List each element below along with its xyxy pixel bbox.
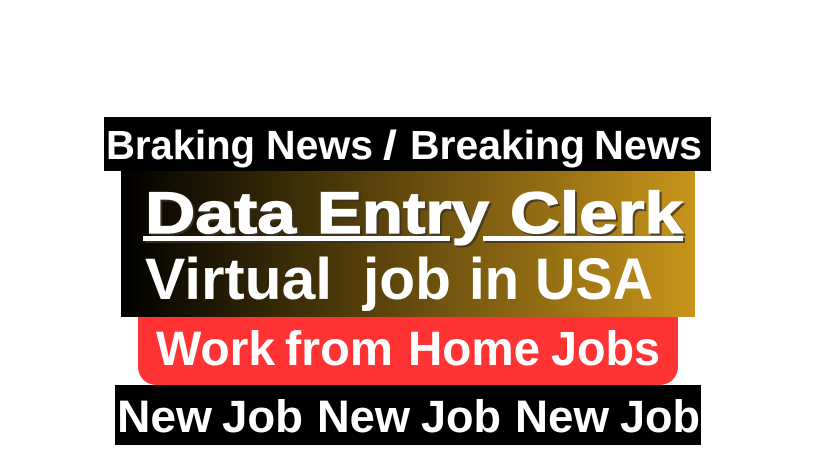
banner: work from home: Home	[408, 323, 540, 376]
banner: breaking news	[104, 117, 711, 171]
banner: new job: Job	[222, 391, 303, 442]
subheading: Virtual job in USA: in	[469, 247, 519, 312]
banner: work from home: Jobs	[551, 323, 660, 376]
heading: Data Entry Clerk: Data	[145, 181, 297, 246]
subheading: Virtual job in USA: job	[362, 247, 451, 312]
banner: breaking news: News	[594, 122, 702, 168]
banner: work from home	[138, 300, 678, 385]
banner: new job: New	[317, 391, 411, 442]
heading: Data Entry Clerk: Data	[147, 183, 299, 248]
banner: work from home: from	[285, 323, 393, 376]
banner: new job	[115, 385, 701, 445]
heading: Data Entry Clerk	[143, 181, 686, 248]
banner: new job: Job	[421, 391, 501, 442]
banner: new job: Job	[620, 391, 700, 442]
heading: Data Entry Clerk: Entry	[319, 183, 491, 248]
banner: new job: New	[515, 391, 610, 442]
banner: breaking news: Breaking	[410, 122, 585, 168]
subheading: Virtual job in USA: Virtual	[145, 247, 332, 312]
banner: breaking news: News	[266, 122, 373, 168]
heading: Data Entry Clerk: Clerk	[512, 183, 686, 248]
heading: Data Entry Clerk: Clerk	[510, 181, 684, 246]
heading: Data Entry Clerk: Entry	[317, 181, 489, 246]
banner: new job: New	[117, 391, 213, 442]
banner: breaking news: /	[383, 122, 397, 168]
subheading: Virtual job in USA: USA	[535, 247, 653, 312]
banner: work from home: Work	[156, 323, 275, 376]
subheading: Virtual job in USA	[145, 247, 653, 312]
banner: breaking news: Braking	[106, 122, 255, 168]
panel: job title on gradient	[121, 171, 695, 317]
